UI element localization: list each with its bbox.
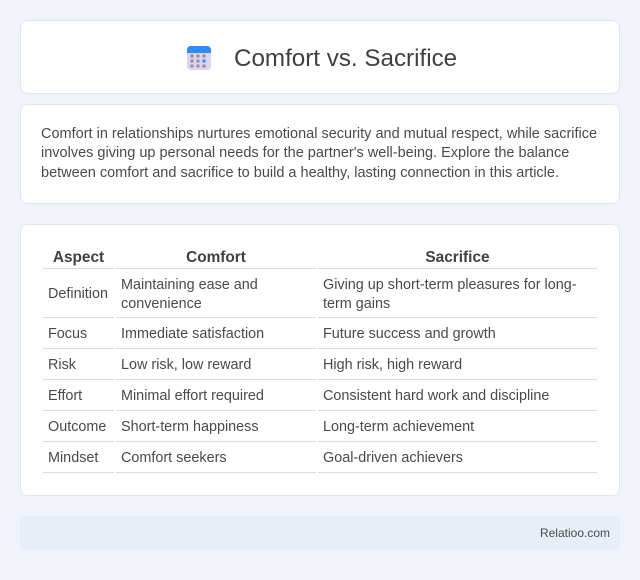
row: Focus [48, 326, 496, 342]
row: Effort [48, 388, 549, 404]
row: Focus: Focus [48, 326, 87, 342]
panel: introduction [20, 104, 620, 204]
row: Risk: Low risk, low reward [121, 357, 251, 373]
row: Mindset [48, 450, 463, 466]
row: Effort: Minimal effort required [121, 388, 264, 404]
row: Focus: Future success and growth [323, 326, 496, 342]
row: Risk: High risk, high reward [323, 357, 462, 373]
row: Effort: Effort [48, 388, 82, 404]
header: Sacrifice: Sacrifice [425, 249, 490, 266]
panel: comparison table [20, 224, 620, 496]
row: Definition: Giving up short-term pleasures for long- [323, 276, 577, 292]
row: Outcome: Long-term achievement [323, 419, 474, 435]
row: Definition [48, 276, 577, 312]
intro text: involves giving up personal needs for the partner's well-being. Explore the balance [41, 145, 569, 161]
footer text: Relatioo.com [540, 526, 610, 540]
intro text [41, 126, 597, 180]
row: Definition: convenience [121, 296, 202, 312]
row: Outcome [48, 419, 474, 435]
row: Outcome: Outcome [48, 419, 106, 435]
header: Aspect: Aspect [53, 249, 104, 266]
row: Definition: Maintaining ease and [121, 276, 258, 292]
panel: title card [20, 20, 620, 94]
row: Definition: term gains [323, 296, 390, 312]
row: Outcome: Short-term happiness [121, 419, 259, 435]
row: Mindset: Goal-driven achievers [323, 450, 463, 466]
header: Comfort: Comfort [186, 249, 246, 266]
row: Definition: Definition [48, 286, 108, 302]
title: Comfort vs. Sacrifice [234, 45, 457, 72]
icon: calendar [187, 46, 211, 70]
row: Risk: Risk [48, 357, 76, 373]
intro text: Comfort in relationships nurtures emotional security and mutual respect, while sacrifice [41, 126, 597, 142]
footer bar [20, 516, 620, 550]
row: Risk [48, 357, 462, 373]
row: Focus: Immediate satisfaction [121, 326, 264, 342]
row: Mindset: Comfort seekers [121, 450, 227, 466]
row: Mindset: Mindset [48, 450, 98, 466]
row: Effort: Consistent hard work and discipline [323, 388, 549, 404]
intro text: between comfort and sacrifice to build a healthy, lasting connection in this article. [41, 164, 559, 180]
